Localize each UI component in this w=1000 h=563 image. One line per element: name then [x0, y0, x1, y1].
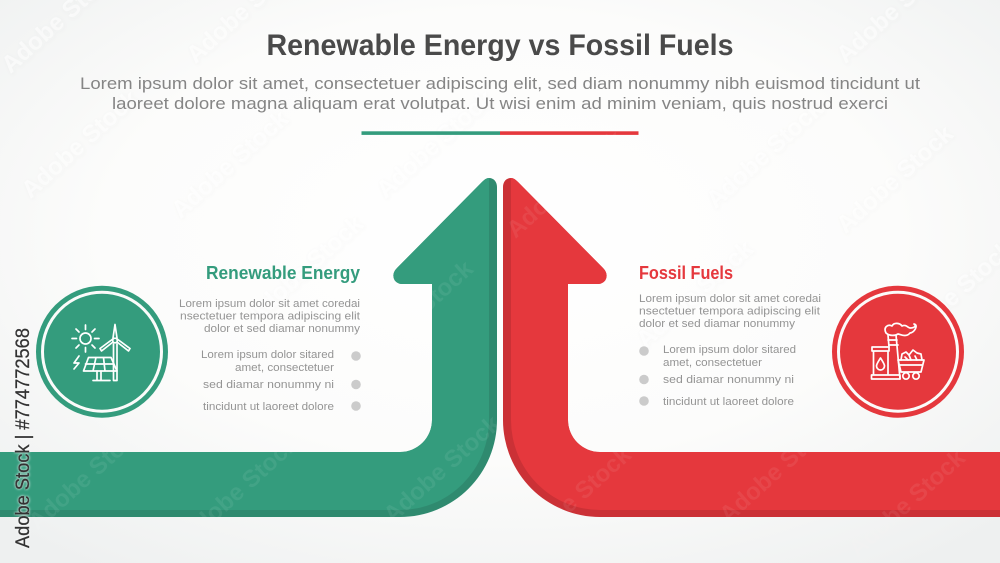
panel: fossil fuels text [639, 263, 821, 408]
description: fossil fuels [639, 293, 821, 330]
subtitle: laoreet dolore magna aliquam erat volutpat. Ut wisi enim ad minim veniam, quis nostrud exerci [112, 94, 888, 113]
arrow watermarks: Adobe Stock [23, 417, 151, 536]
panel: renewable energy text [179, 263, 361, 413]
bullet list: fossil fuels: tincidunt ut laoreet dolore [663, 396, 794, 408]
arrow watermarks: Adobe Stock [351, 255, 479, 374]
description: renewable energy: dolor et sed diamar nonummy [204, 323, 361, 335]
description: fossil fuels: Lorem ipsum dolor sit amet coredai [639, 293, 821, 305]
title divider [362, 131, 638, 135]
subtitle: Lorem ipsum dolor sit amet, consectetuer adipiscing elit, sed diam nonummy nibh euismod tincidunt ut [80, 74, 920, 93]
bullet list: fossil fuels [639, 344, 796, 408]
bullet list: renewable energy: amet, consectetuer [235, 362, 334, 374]
background watermarks: Adobe Stock [371, 85, 499, 204]
description: fossil fuels: dolor et sed diamar nonummy [639, 318, 796, 330]
background watermarks: Adobe Stock [631, 235, 759, 354]
green arrow [0, 178, 497, 517]
description: renewable energy: nsectetuer tempora adipiscing elit [180, 310, 360, 322]
background watermarks: Adobe Stock [831, 120, 959, 239]
arrow watermarks: Adobe Stock [509, 441, 637, 560]
heading: renewable energy: Renewable Energy [206, 263, 360, 283]
subtitle [80, 74, 920, 113]
description: renewable energy: Lorem ipsum dolor sit amet coredai [179, 298, 360, 310]
description: fossil fuels: nsectetuer tempora adipiscing elit [639, 306, 820, 318]
arrow watermarks: Adobe Stock [843, 444, 971, 563]
title: Renewable Energy vs Fossil Fuels [266, 29, 734, 62]
background watermarks: Adobe Stock [701, 95, 829, 214]
arrow watermarks: Adobe Stock [501, 125, 629, 244]
icon badge: fossil fuels [832, 286, 964, 418]
background watermarks: Adobe Stock [16, 85, 144, 204]
icon: sun, wind turbine and solar panel [72, 324, 130, 380]
background watermarks [0, 0, 1000, 354]
arrow watermarks: Adobe Stock [176, 430, 304, 549]
icon: factory, oil barrel and coal cart [872, 323, 924, 379]
arrow watermarks [23, 125, 971, 563]
bullet list: fossil fuels: amet, consectetuer [663, 357, 762, 369]
bullet list: fossil fuels: sed diamar nonummy ni [663, 374, 794, 386]
red arrow [503, 178, 1000, 517]
icon badge: renewable energy [36, 286, 168, 418]
stock id label: Adobe Stock | #774772568 [13, 328, 34, 548]
description: renewable energy [179, 298, 361, 335]
bullet list: renewable energy: tincidunt ut laoreet dolore [203, 401, 334, 413]
bullet list: renewable energy [201, 349, 361, 413]
bullet list: renewable energy: sed diamar nonummy ni [203, 379, 334, 391]
arrow watermarks: Adobe Stock [378, 410, 506, 529]
background watermarks: Adobe Stock [241, 210, 369, 329]
heading: fossil fuels: Fossil Fuels [639, 263, 733, 283]
background watermarks: Adobe Stock [166, 105, 294, 224]
bullet list: renewable energy: Lorem ipsum dolor sitared [201, 349, 334, 361]
arrow watermarks: Adobe Stock [714, 410, 842, 529]
bullet list: fossil fuels: Lorem ipsum dolor sitared [663, 344, 796, 356]
